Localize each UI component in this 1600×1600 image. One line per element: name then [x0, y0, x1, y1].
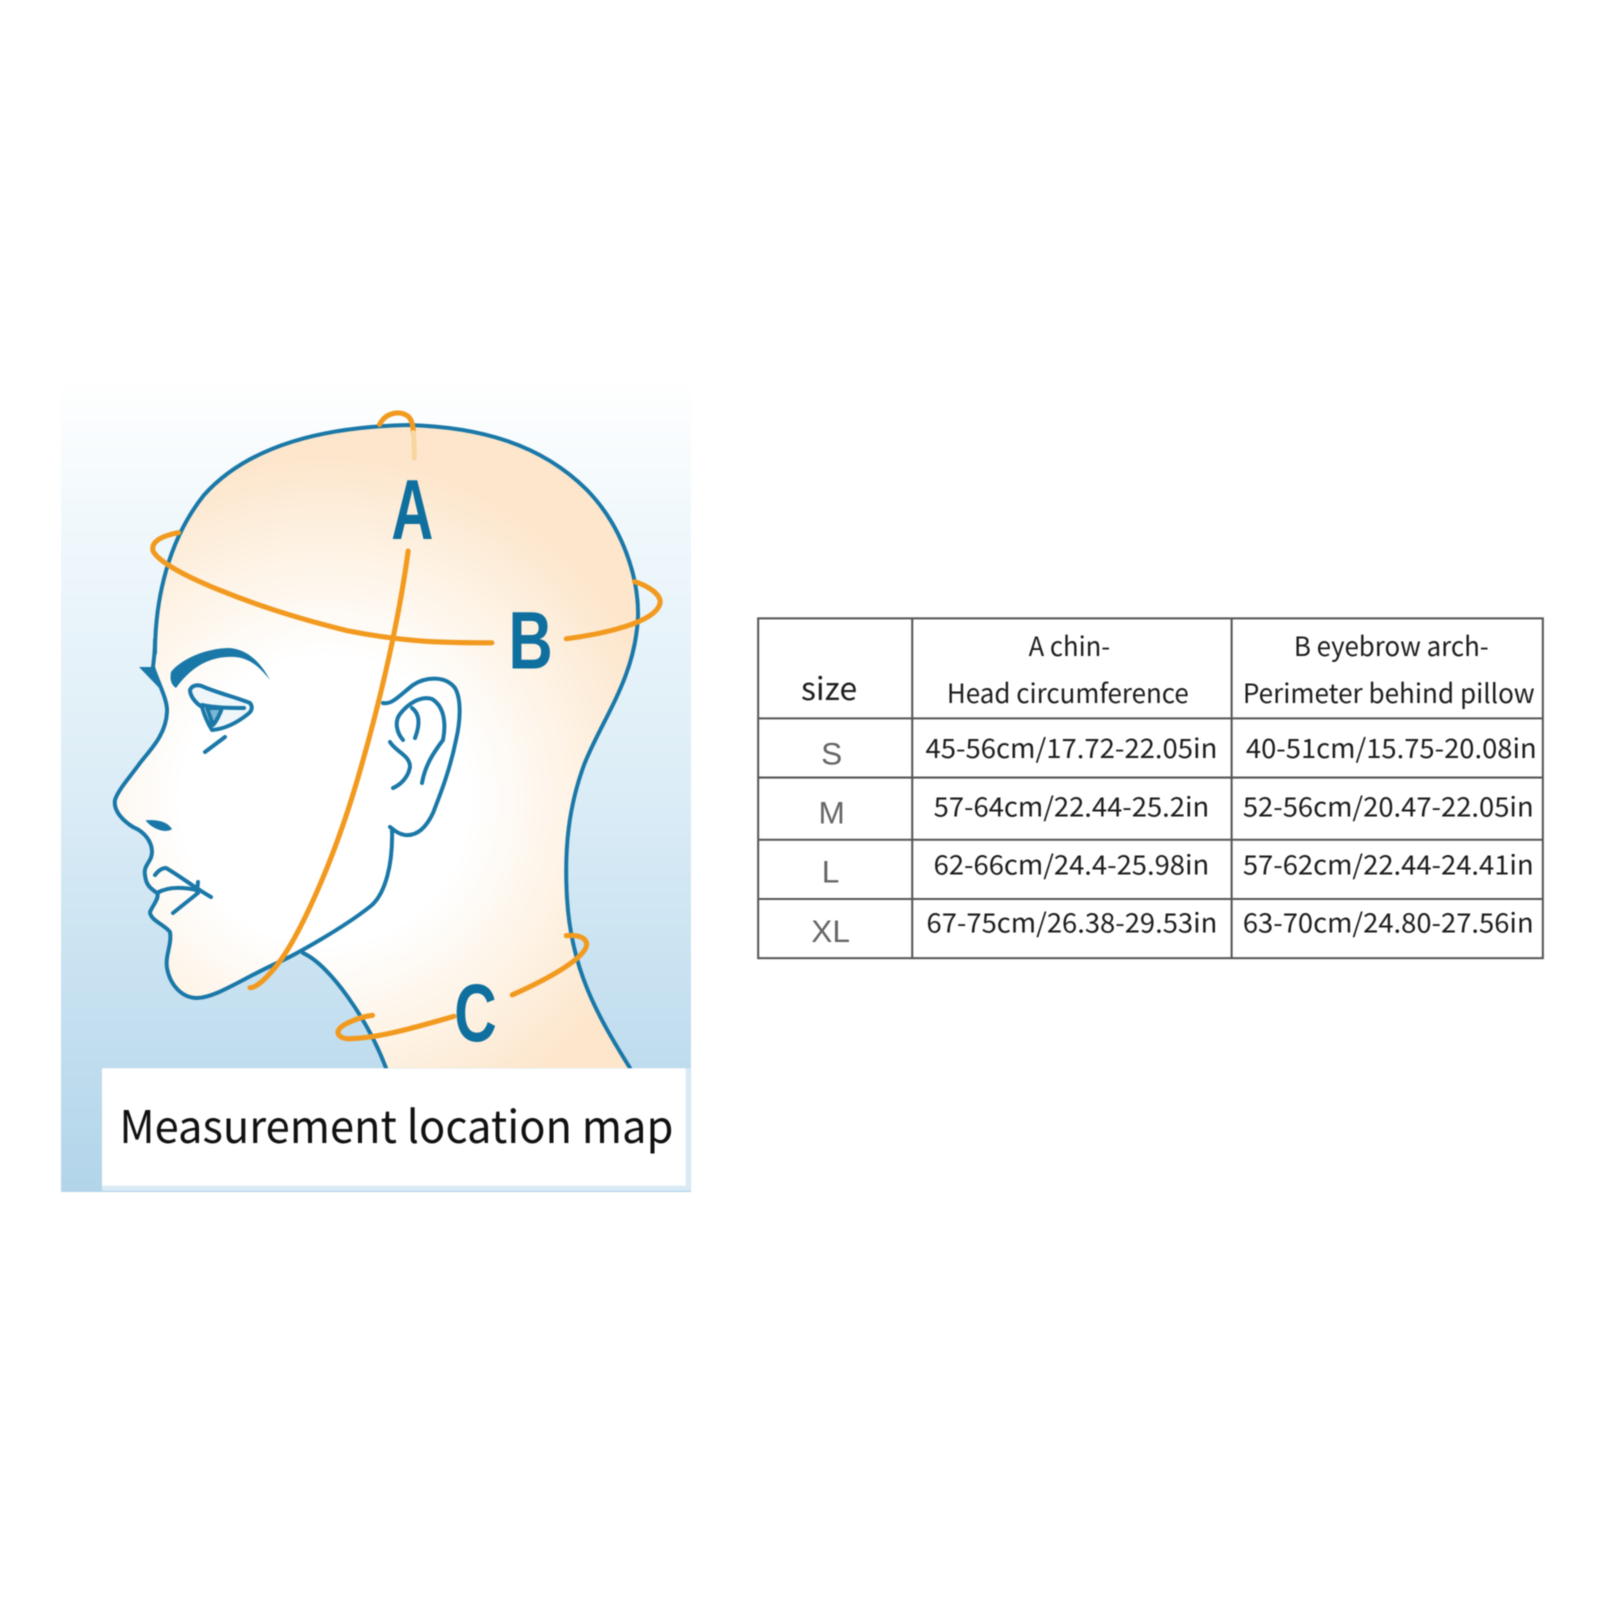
header: B eyebrow arch: Perimeter behind pillow: [1243, 672, 1535, 711]
header: B eyebrow arch: [1243, 625, 1535, 711]
face profile: [115, 640, 392, 998]
row S: 40-51cm/15.75-20.08in: [1246, 727, 1537, 766]
header: size: size: [801, 664, 857, 710]
row L: 62-66cm/24.4-25.98in: [934, 843, 1209, 882]
measure line B: [153, 533, 660, 643]
row XL: 63-70cm/24.80-27.56in: [1243, 902, 1534, 941]
panel: measurement location map: [61, 380, 691, 1192]
skull and back of neck: [155, 425, 638, 1068]
nostril: [147, 821, 171, 830]
row M: M: [818, 794, 845, 830]
row S: 45-56cm/17.72-22.05in: [926, 727, 1217, 766]
inner ear helix: [397, 698, 444, 783]
label C: C: [454, 969, 497, 1059]
eye: [190, 685, 252, 730]
row L: [822, 843, 1534, 890]
row XL: 67-75cm/26.38-29.53in: [927, 902, 1217, 941]
header: A chin: [947, 625, 1189, 711]
row S: [821, 727, 1537, 771]
caption text: Measurement location map: [119, 1091, 673, 1156]
header: B eyebrow arch: B eyebrow arch-: [1294, 625, 1489, 664]
ear: [383, 679, 460, 835]
measure line A: [250, 413, 414, 988]
label B: B: [508, 596, 553, 686]
head and neck fill: [115, 425, 638, 1068]
panel background: [61, 380, 691, 1192]
row L: 57-62cm/22.44-24.41in: [1243, 843, 1534, 882]
row XL: [811, 902, 1534, 949]
lips: [155, 868, 211, 913]
row M: 52-56cm/20.47-22.05in: [1243, 785, 1534, 824]
inner ear fold: [412, 708, 418, 738]
size table: [758, 618, 1543, 958]
inner ear lobe curve: [390, 742, 410, 788]
header: A chin: A chin-: [1029, 625, 1110, 664]
under-eye line: [205, 737, 225, 752]
caption box: [102, 1068, 686, 1186]
measure lines and labels: [102, 413, 691, 1191]
row S: S: [821, 735, 842, 771]
eyebrow: [171, 648, 270, 688]
label A: A: [391, 462, 433, 557]
head outline: [115, 425, 638, 1068]
icon: brow notch: [139, 667, 163, 692]
row M: 57-64cm/22.44-25.2in: [934, 785, 1209, 824]
caption strip: [102, 1068, 691, 1191]
measure line C: [338, 935, 587, 1039]
header: A chin: Head circumference: [947, 672, 1189, 711]
row L: L: [822, 854, 839, 890]
row XL: XL: [811, 913, 850, 949]
row M: [818, 785, 1534, 830]
front of neck: [303, 953, 386, 1068]
table grid: [758, 618, 1543, 958]
